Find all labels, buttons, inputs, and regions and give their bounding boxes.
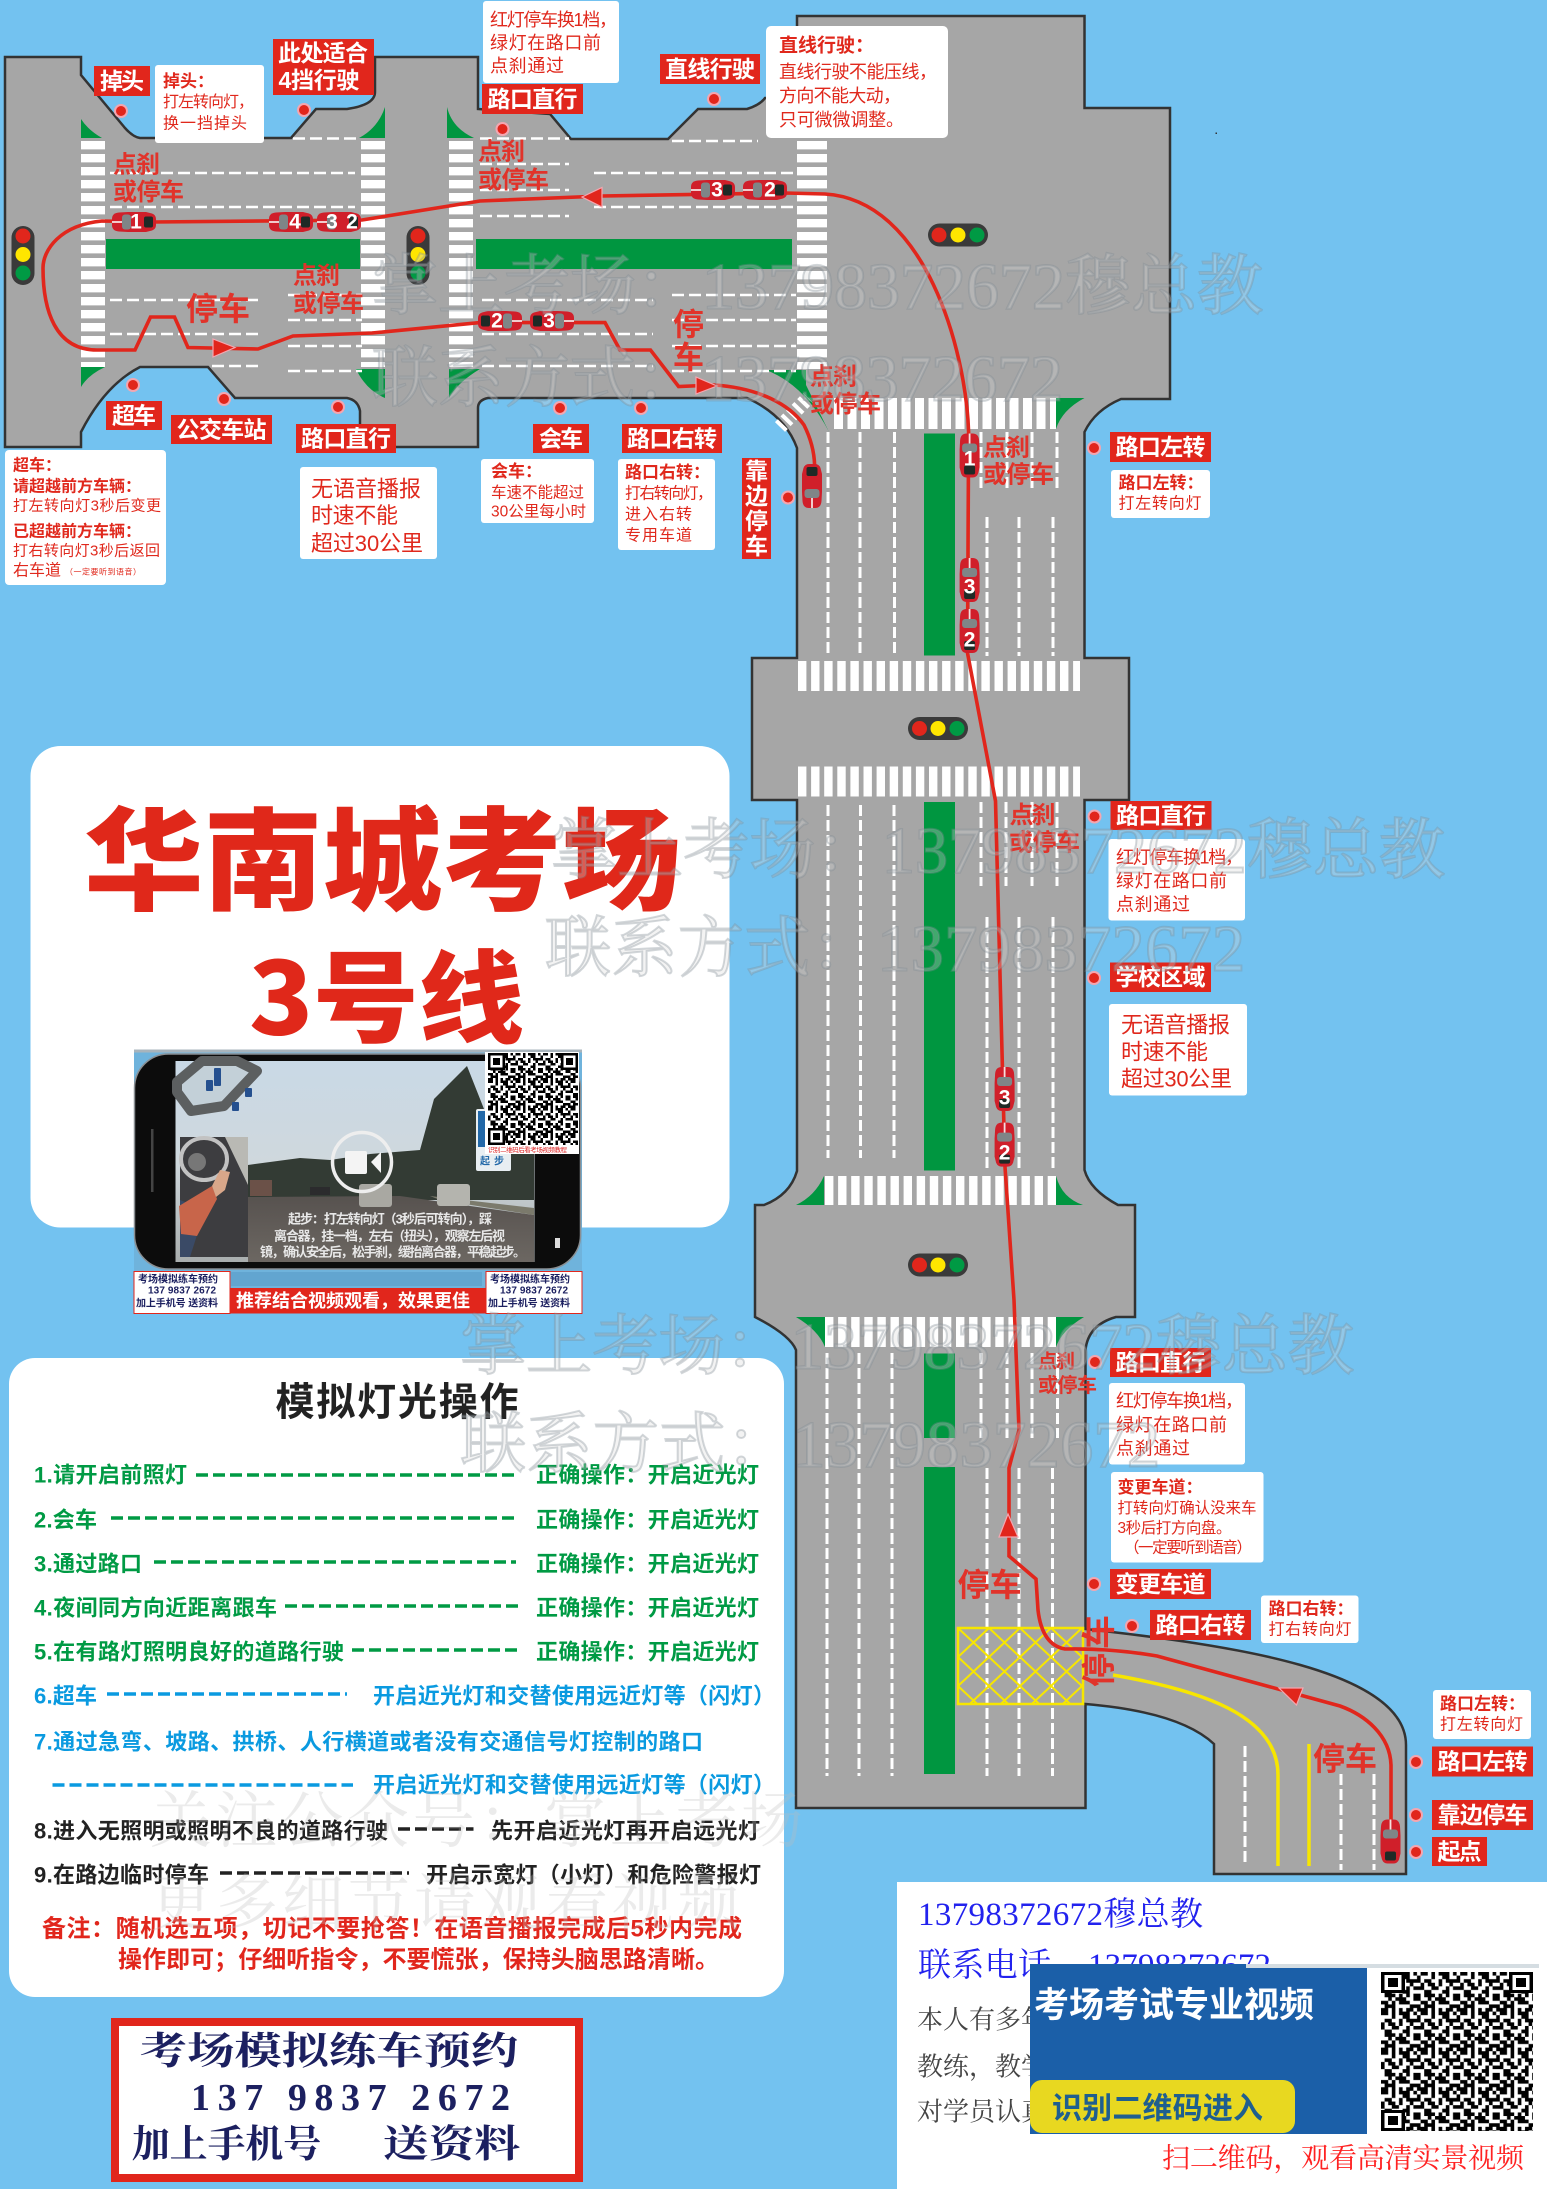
note: 无语音播报 middle: 时速不能 [1121, 1040, 1208, 1064]
row 4: 4.夜间同方向近距离跟车 [34, 1596, 277, 1620]
label: 靠边停车: 靠边停车 [1438, 1802, 1528, 1828]
on-road brake and stop text: 停 [673, 308, 704, 342]
note: 无语音播报 middle [1109, 1004, 1247, 1096]
note: 红灯停车 top: 红灯停车换1档， [490, 10, 617, 30]
cars: 2 [491, 310, 503, 332]
side tag: 起 步 [480, 1154, 504, 1168]
note: 超车: 已超越前方车辆： [13, 522, 141, 540]
label: 掉头 [94, 66, 150, 96]
on-road brake and stop text: 停车 [186, 291, 250, 327]
note: 掉头: 换一挡掉头 [163, 114, 247, 132]
note: 超车: （一定要听到语音） [65, 566, 141, 576]
note: 路口右转: 路口右转： [625, 463, 710, 482]
row 7: 开启近光灯和交替使用远近灯等（闪灯） [373, 1772, 775, 1798]
note: 路口左转 upper [1111, 470, 1210, 518]
label: 路口右转: 路口右转 [627, 426, 717, 452]
video map inset [177, 1061, 257, 1111]
note: 掉头: 掉头： [163, 72, 214, 91]
cars: 1 [130, 210, 142, 234]
booking ad: 137 9837 2672 [191, 2077, 510, 2119]
cars: 3 [326, 210, 338, 234]
note: 红灯停车 middle: 红灯停车换1档， [1116, 848, 1243, 868]
on-road brake and stop text: 停车 [1081, 1615, 1119, 1687]
QR code large [1367, 1968, 1539, 2134]
button: scan [1030, 2080, 1295, 2133]
heading: light operation: 模拟灯光操作 [276, 1382, 518, 1424]
note: 路口左转 lower: 路口左转： [1440, 1694, 1525, 1714]
row 4 [34, 1596, 759, 1620]
note: 路口右转 lower: 打右转向灯 [1268, 1620, 1352, 1638]
note: 无语音播报 lower left: 无语音播报 [311, 476, 421, 502]
label: 公交车站: 公交车站 [176, 416, 266, 442]
row 6 [34, 1684, 775, 1708]
label: 靠边停车 vertical [742, 458, 771, 559]
note: 掉头 [155, 65, 264, 143]
note: 红灯停车 lower: 点刹通过 [1116, 1438, 1190, 1458]
route arrows [213, 188, 1303, 1705]
panel: simulated light operation [9, 1358, 784, 1997]
watermarks [150, 250, 1445, 1939]
on-road brake and stop text: 或停车 [293, 290, 364, 318]
note: 超车: 右车道 [13, 562, 61, 580]
heading: exam site name: 华南城考场 [84, 772, 681, 934]
caption: 离合器，挂一档，左右（扭头），观察左后视 [274, 1228, 505, 1244]
caption [260, 1212, 526, 1260]
cars [112, 178, 1400, 1864]
cars: 2 [964, 628, 975, 652]
video card: 考场考试专业视频 [1034, 1986, 1314, 2025]
intro text: 对学员认真 [917, 2098, 1048, 2126]
note: 变更车道: 变更车道： [1118, 1477, 1202, 1497]
label: 起点: 起点 [1438, 1838, 1482, 1864]
note: 掉头: 打左转向灯， [163, 93, 254, 111]
lane markings [110, 138, 1374, 1870]
video driver inset [179, 1137, 248, 1257]
note: 路口左转 lower: 打左转向灯 [1440, 1716, 1523, 1734]
note: 路口右转: 专用车道 [625, 526, 692, 544]
exam route line [43, 193, 1391, 1840]
booking ad: 考场模拟练车预约 [140, 2031, 518, 2073]
green medians [81, 107, 1084, 1774]
row 8: 8.进入无照明或照明不良的道路行驶 [34, 1818, 388, 1844]
crosswalks [93, 141, 1080, 1332]
note: 会车: 车速不能超过 [491, 484, 584, 502]
intro text: 本人有多年 [917, 2006, 1047, 2034]
yellow double line [1113, 1675, 1309, 1866]
contact name: 13798372672穆总教 [918, 1896, 1203, 1933]
row 8: 先开启近光灯再开启远光灯 [491, 1818, 760, 1844]
mini ad right: 加上手机号 送资料 [488, 1296, 570, 1310]
remark [42, 1914, 742, 1974]
note: 红灯停车 lower: 红灯停车换1档， [1116, 1391, 1243, 1411]
on-road brake and stop text: 点刹 [478, 138, 525, 166]
row 9: 开启示宽灯（小灯）和危险警报灯 [426, 1862, 761, 1888]
booking ad: 送资料 [383, 2124, 520, 2166]
label: 路口左转 lower: 路口左转 [1438, 1748, 1528, 1774]
contact phone: 13798372672 [1088, 1948, 1271, 1984]
note: 路口左转 upper: 路口左转： [1118, 474, 1204, 492]
note: 超车 [5, 450, 166, 585]
scan caption: 扫二维码，观看高清实景视频 [1162, 2142, 1525, 2174]
note: 变更车道 [1111, 1472, 1264, 1562]
note: 无语音播报 middle: 无语音播报 [1121, 1012, 1230, 1038]
on-road brake and stop text: 停车 [1313, 1741, 1377, 1777]
note: 路口右转 lower [1261, 1596, 1358, 1643]
note: 变更车道: （一定要听到语音） [1124, 1538, 1252, 1556]
row 7: 7.通过急弯、坡路、拱桥、人行横道或者没有交通信号灯控制的路口 [34, 1730, 703, 1754]
note: 路口右转: 进入右转 [625, 506, 692, 524]
mini ad left: 137 9837 2672 [148, 1286, 216, 1296]
booking ad: 加上手机号 [132, 2124, 321, 2166]
mini ad right [486, 1272, 582, 1314]
row 5 [34, 1640, 759, 1664]
row 4: 正确操作：开启近光灯 [536, 1596, 759, 1620]
watermarks: 更多细节请观看视频 [150, 1871, 741, 1939]
note: 红灯停车 top: 点刹通过 [490, 56, 564, 76]
watermarks: 联系方式：13798372672 [545, 912, 1245, 986]
row 3: 正确操作：开启近光灯 [536, 1552, 759, 1576]
on-road brake and stop text: 点刹 [113, 152, 160, 178]
row 2: 2.会车 [34, 1508, 97, 1532]
on-road brake and stop text: 或停车 [983, 462, 1054, 488]
on-road brake and stop text: 或停车 [1038, 1373, 1097, 1397]
row 2 [34, 1508, 759, 1532]
row 1: 1.请开启前照灯 [34, 1462, 187, 1488]
label: 直线行驶: 直线行驶 [665, 56, 755, 82]
row 9 [34, 1862, 761, 1888]
row 1: 正确操作：开启近光灯 [536, 1462, 759, 1488]
note: 红灯停车 top [483, 1, 619, 83]
on-road brake and stop text: 点刹 [293, 262, 340, 290]
on-road brake and stop text: 车 [673, 340, 704, 376]
cars: 2 [764, 178, 776, 202]
video card [1030, 1964, 1539, 2134]
cars: 2 [346, 210, 358, 234]
mini ad right: 考场模拟练车预约 [490, 1272, 570, 1286]
on-road brake and stop text: 点刹 [1038, 1350, 1075, 1372]
mini ad right: 137 9837 2672 [500, 1286, 568, 1296]
label: 此处适合4挡行驶 [273, 39, 374, 95]
note: 红灯停车 top: 绿灯在路口前 [490, 33, 601, 53]
traffic lights [12, 224, 988, 1276]
note: 路口右转 lower: 路口右转： [1268, 1600, 1354, 1618]
note: 红灯停车 middle: 绿灯在路口前 [1116, 871, 1227, 891]
note: 超车: 请超越前方车辆： [13, 476, 141, 496]
caption: 起步：打左转向灯（3秒后可转向），踩 [288, 1212, 492, 1226]
row 3: 3.通过路口 [34, 1552, 142, 1576]
contact phone [918, 1947, 1271, 1984]
watermarks: 掌上考场：13798372672穆总教 [460, 1310, 1354, 1384]
note: 变更车道: 3秒后打方向盘。 [1118, 1518, 1232, 1537]
note: 直线行驶: 直线行驶： [779, 34, 874, 56]
label: 靠边停车 vertical: 车 [745, 533, 768, 559]
on-road brake and stop text: 停车 [958, 1567, 1022, 1603]
row 5: 5.在有路灯照明良好的道路行驶 [34, 1640, 344, 1664]
QR code small [485, 1052, 579, 1154]
label: 学校区域: 学校区域 [1116, 964, 1206, 990]
note: 无语音播报 lower left [300, 467, 437, 559]
label: 路口直行 top: 路口直行 [488, 86, 578, 112]
note: 无语音播报 lower left: 超过30公里 [311, 531, 423, 556]
icon: video play [332, 1132, 392, 1192]
cars: 3 [543, 310, 555, 332]
QR code small: 识别二维码后看考场视频教程 [488, 1145, 568, 1154]
note: 红灯停车 lower: 绿灯在路口前 [1116, 1415, 1227, 1435]
note: 直线行驶: 直线行驶不能压线， [779, 62, 937, 82]
road network [5, 16, 1406, 1874]
label: 掉头: 掉头 [100, 68, 144, 94]
caption: 镜，确认安全后，松手刹，缓抬离合器，平稳起步。 [260, 1244, 526, 1260]
row 6: 6.超车 [34, 1684, 97, 1708]
on-road brake and stop text [113, 138, 1377, 1777]
note: 会车: 30公里每小时 [491, 502, 586, 520]
video road [248, 1196, 534, 1262]
note: 无语音播报 lower left: 时速不能 [311, 503, 398, 528]
cars: 4 [289, 210, 301, 234]
row 3 [34, 1552, 759, 1576]
note: 红灯停车 middle [1108, 839, 1245, 920]
watermarks: 联系方式：13798372672 [372, 342, 1063, 416]
cars: 3 [999, 1086, 1010, 1110]
heading: line number: 3号线 [249, 918, 524, 1064]
note: 超车: 超车： [13, 456, 61, 474]
note: 会车 [481, 459, 594, 523]
on-road brake and stop text: 或停车 [1009, 830, 1080, 856]
mini ad left [134, 1272, 230, 1314]
on-road brake and stop text: 或停车 [810, 391, 881, 418]
remark: 备注：随机选五项，切记不要抢答！在语音播报完成后5秒内完成 [42, 1914, 742, 1942]
remark: 操作即可；仔细听指令，不要慌张，保持头脑思路清晰。 [118, 1946, 719, 1974]
note: 变更车道: 打转向灯确认没来车 [1118, 1499, 1256, 1517]
label: 路口左转 upper: 路口左转 [1116, 434, 1206, 460]
on-road brake and stop text: 或停车 [478, 167, 549, 194]
cars: 1 [964, 448, 976, 470]
panel: contact [897, 1882, 1547, 2189]
on-road brake and stop text: 或停车 [113, 179, 184, 206]
note: 超车: 打右转向灯3秒后返回 [13, 542, 160, 560]
note: 路口左转 upper: 打左转向灯 [1118, 494, 1202, 512]
watermarks: 关注公众号：掌上考场 [150, 1788, 803, 1856]
note: 会车: 会车： [491, 461, 542, 481]
note: 红灯停车 middle: 点刹通过 [1116, 894, 1190, 914]
label: 变更车道: 变更车道 [1116, 1571, 1206, 1597]
label: 靠边停车 vertical: 靠 [745, 458, 768, 484]
note: 红灯停车 lower [1109, 1383, 1245, 1464]
row 7 [34, 1730, 775, 1798]
cars: 2 [999, 1142, 1010, 1164]
note: 直线行驶: 方向不能大动， [779, 86, 901, 106]
note: 无语音播报 middle: 超过30公里 [1121, 1066, 1232, 1092]
mini ad left: 加上手机号 送资料 [136, 1296, 218, 1310]
booking ad [115, 2022, 579, 2178]
row 5: 正确操作：开启近光灯 [536, 1640, 759, 1664]
on-road brake and stop text: 点刹 [1010, 802, 1056, 829]
intro text [917, 2006, 1048, 2126]
row 6: 开启近光灯和交替使用远近灯等（闪灯） [373, 1684, 775, 1708]
label: 超车: 超车 [112, 402, 156, 428]
tiny speck [1216, 132, 1217, 134]
note: 路口左转 lower [1433, 1690, 1531, 1739]
note: 路口右转 [618, 459, 715, 550]
label: 此处适合4挡行驶: 此处适合 [278, 40, 368, 66]
side tag [476, 1109, 511, 1171]
watermarks: 掌上考场：13798372672穆总教 [372, 250, 1263, 324]
label: 靠边停车 vertical: 边 [745, 483, 768, 509]
label: 此处适合4挡行驶: 4挡行驶 [278, 67, 360, 93]
label: 会车: 会车 [539, 426, 583, 452]
panel: title [30, 746, 730, 1228]
on-road brake and stop text: 点刹 [983, 434, 1030, 462]
label: 路口直行 lower right: 路口直行 [1116, 1350, 1206, 1376]
mini ad left: 考场模拟练车预约 [138, 1272, 218, 1286]
contact phone: 联系电话 [918, 1947, 1051, 1984]
row 8 [34, 1818, 760, 1844]
row 9: 9.在路边临时停车 [34, 1862, 209, 1888]
note: 路口右转: 打右转向灯， [625, 484, 713, 502]
button: scan: 识别二维码进入 [1052, 2092, 1263, 2126]
note: 超车: 打左转向灯3秒后变更 [13, 498, 161, 514]
location dots [115, 93, 1422, 1858]
label: 靠边停车 vertical: 停 [745, 508, 768, 534]
video sky [176, 1061, 534, 1262]
note: 直线行驶: 只可微微调整。 [779, 110, 904, 130]
label: 路口直行 middle: 路口直行 [1116, 802, 1206, 828]
watermarks: 联系方式：13798372672 [460, 1408, 1160, 1482]
banner: recommend video: 推荐结合视频观看，效果更佳 [236, 1290, 470, 1311]
yellow grid box [958, 1628, 1083, 1704]
intro text: 教练，教学 [917, 2052, 1047, 2082]
panel: video thumbnail [134, 1050, 582, 1314]
cars: 3 [711, 178, 723, 202]
note: 直线行驶 [766, 26, 948, 138]
row 1 [34, 1462, 759, 1488]
label: 路口右转 lower: 路口右转 [1156, 1612, 1246, 1638]
row 2: 正确操作：开启近光灯 [536, 1508, 759, 1532]
cars: 3 [964, 576, 975, 598]
on-road brake and stop text: 点刹 [810, 364, 857, 390]
label: 路口直行 lower: 路口直行 [301, 426, 391, 452]
video trees [248, 1066, 534, 1200]
watermarks: 掌上考场：13798372672穆总教 [551, 814, 1445, 888]
